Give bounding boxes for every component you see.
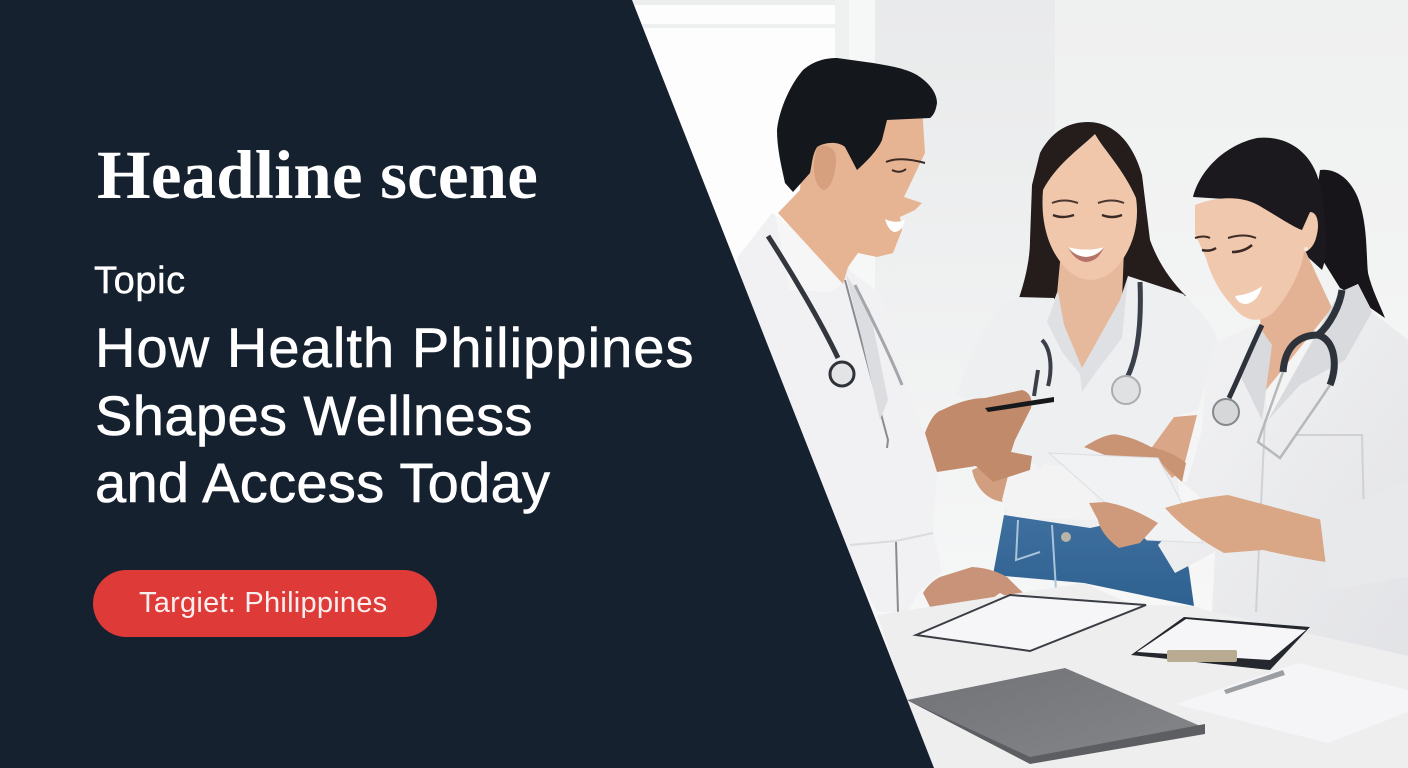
- topic label: Topic: [94, 260, 186, 302]
- right health worker: [1158, 138, 1408, 656]
- hair back: [1004, 122, 1186, 370]
- stethoscope: [1229, 325, 1262, 398]
- jeans: [993, 510, 1194, 606]
- table with documents and laptop: [877, 583, 1408, 768]
- shirt lower: [1002, 460, 1100, 520]
- heading: headline scene: Headline scene: [97, 137, 538, 213]
- ponytail and hair: [1310, 170, 1385, 318]
- hair: [777, 58, 937, 192]
- target pill: Targiet: Philippines: [139, 587, 387, 619]
- clipboard: [1131, 617, 1310, 670]
- left health worker: [737, 58, 1054, 612]
- notebook on table: [916, 595, 1146, 651]
- middle health worker: [957, 122, 1218, 606]
- neck: [1260, 250, 1332, 395]
- stethoscope: [768, 236, 838, 358]
- face: [1195, 198, 1318, 320]
- main title: How Health Philippines: [95, 316, 695, 379]
- hands of right worker: [1089, 480, 1408, 590]
- scrub top: [957, 276, 1218, 530]
- face: [1042, 134, 1137, 280]
- papers held between workers: [1012, 402, 1203, 543]
- left forearm: [972, 462, 1030, 502]
- main title: Shapes Wellness: [95, 384, 533, 446]
- main title: [95, 316, 695, 514]
- main title: and Access Today: [95, 451, 550, 514]
- room background: [620, 0, 1408, 768]
- neck: [1056, 250, 1124, 372]
- neck and face: [778, 105, 925, 284]
- hand on paper: [923, 567, 1028, 610]
- coat: [1158, 284, 1408, 656]
- laptop: [907, 668, 1205, 763]
- loose paper: [1175, 663, 1408, 743]
- stethoscope: [1127, 282, 1140, 378]
- dark diagonal panel: [0, 0, 934, 768]
- right arm: [1150, 415, 1197, 478]
- hand with pen: [925, 390, 1032, 482]
- pen: [1224, 670, 1285, 694]
- body coat and sleeve: [737, 213, 942, 612]
- target pill: [93, 570, 437, 637]
